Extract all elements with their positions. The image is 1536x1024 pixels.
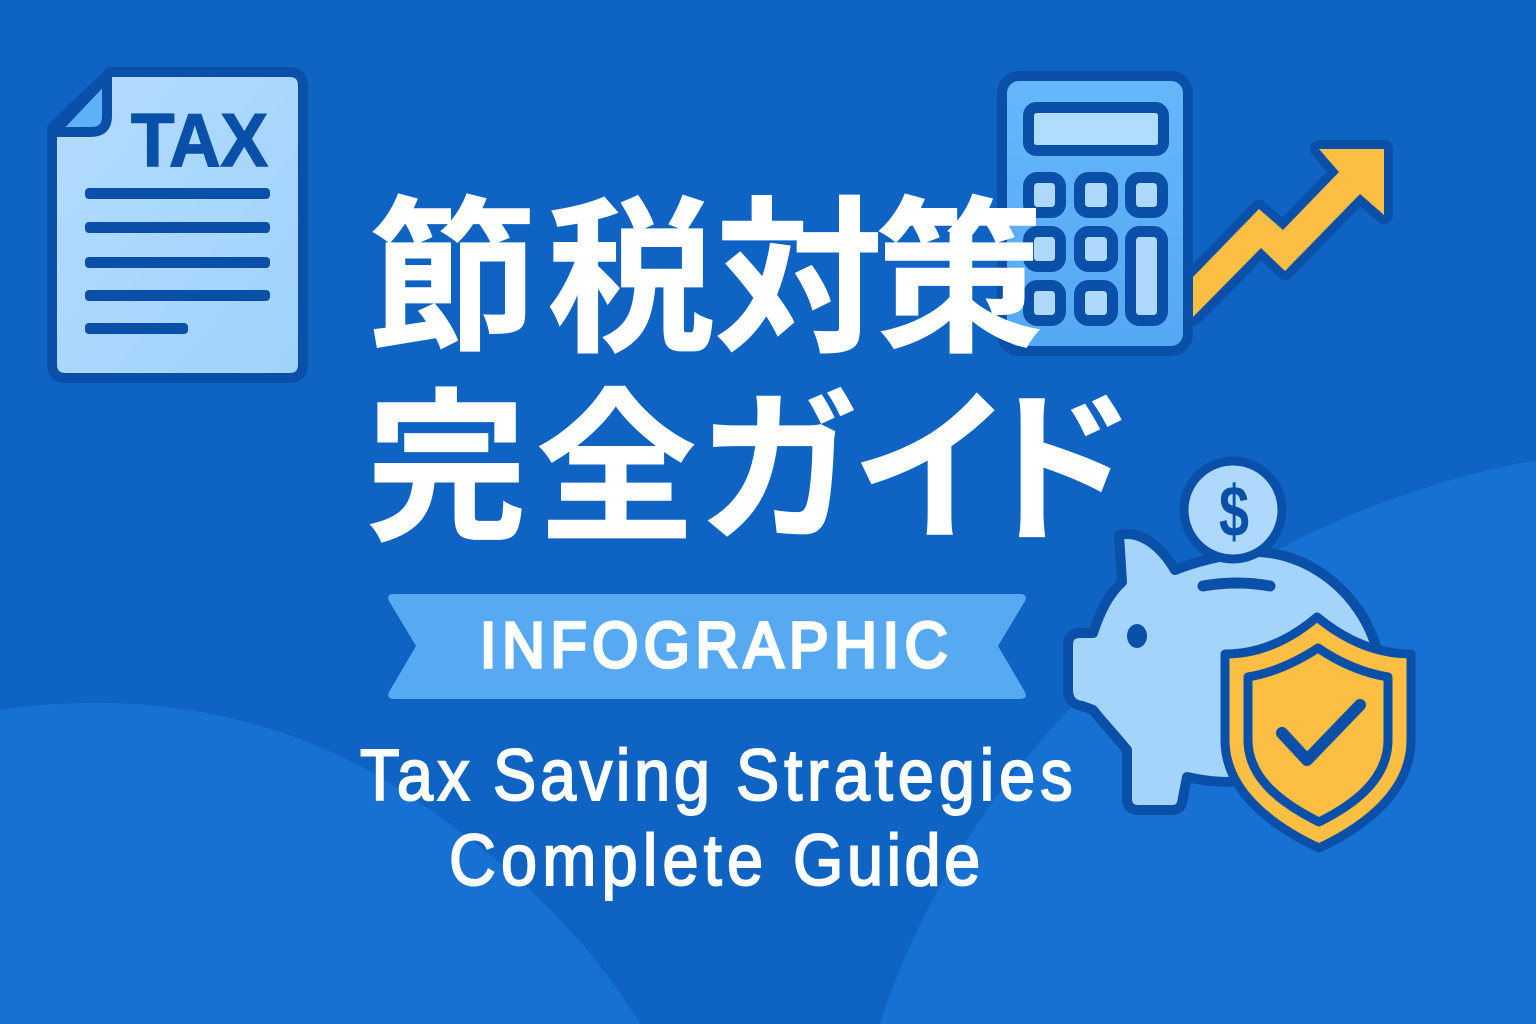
subtitle: Saving [493,735,710,816]
icon: dollar coin [1184,461,1282,559]
background wave: lower left [0,703,640,1024]
calculator keys [1028,178,1162,320]
shield check mark [1282,705,1360,760]
piggy coin slot [1203,583,1270,586]
icon: piggy bank [1068,534,1377,810]
ribbon banner [388,594,1026,699]
ribbon label: INFOGRAPHIC [480,610,947,682]
shield inner outline [1248,648,1388,822]
piggy eye [1127,624,1147,648]
subtitle: Guide [793,820,980,901]
label: TAX: TAX [131,98,268,182]
subtitle: Strategies [736,735,1073,816]
icon: dollar coin: $ [1219,472,1249,552]
background wave: right [880,460,1536,1024]
title line 2: 完全ガイド [367,379,1136,563]
subtitle: Complete [449,820,763,901]
calculator display [1028,108,1164,150]
icon: tax document [52,72,303,378]
icon: shield [1225,617,1411,848]
icon: folded corner [54,76,107,132]
icon: calculator [1002,76,1188,351]
icon: growth arrow [1193,149,1384,317]
document text lines [85,188,270,334]
subtitle [360,735,1073,901]
title line 1: 節税対策 [369,186,1043,374]
subtitle: Tax [360,735,470,816]
